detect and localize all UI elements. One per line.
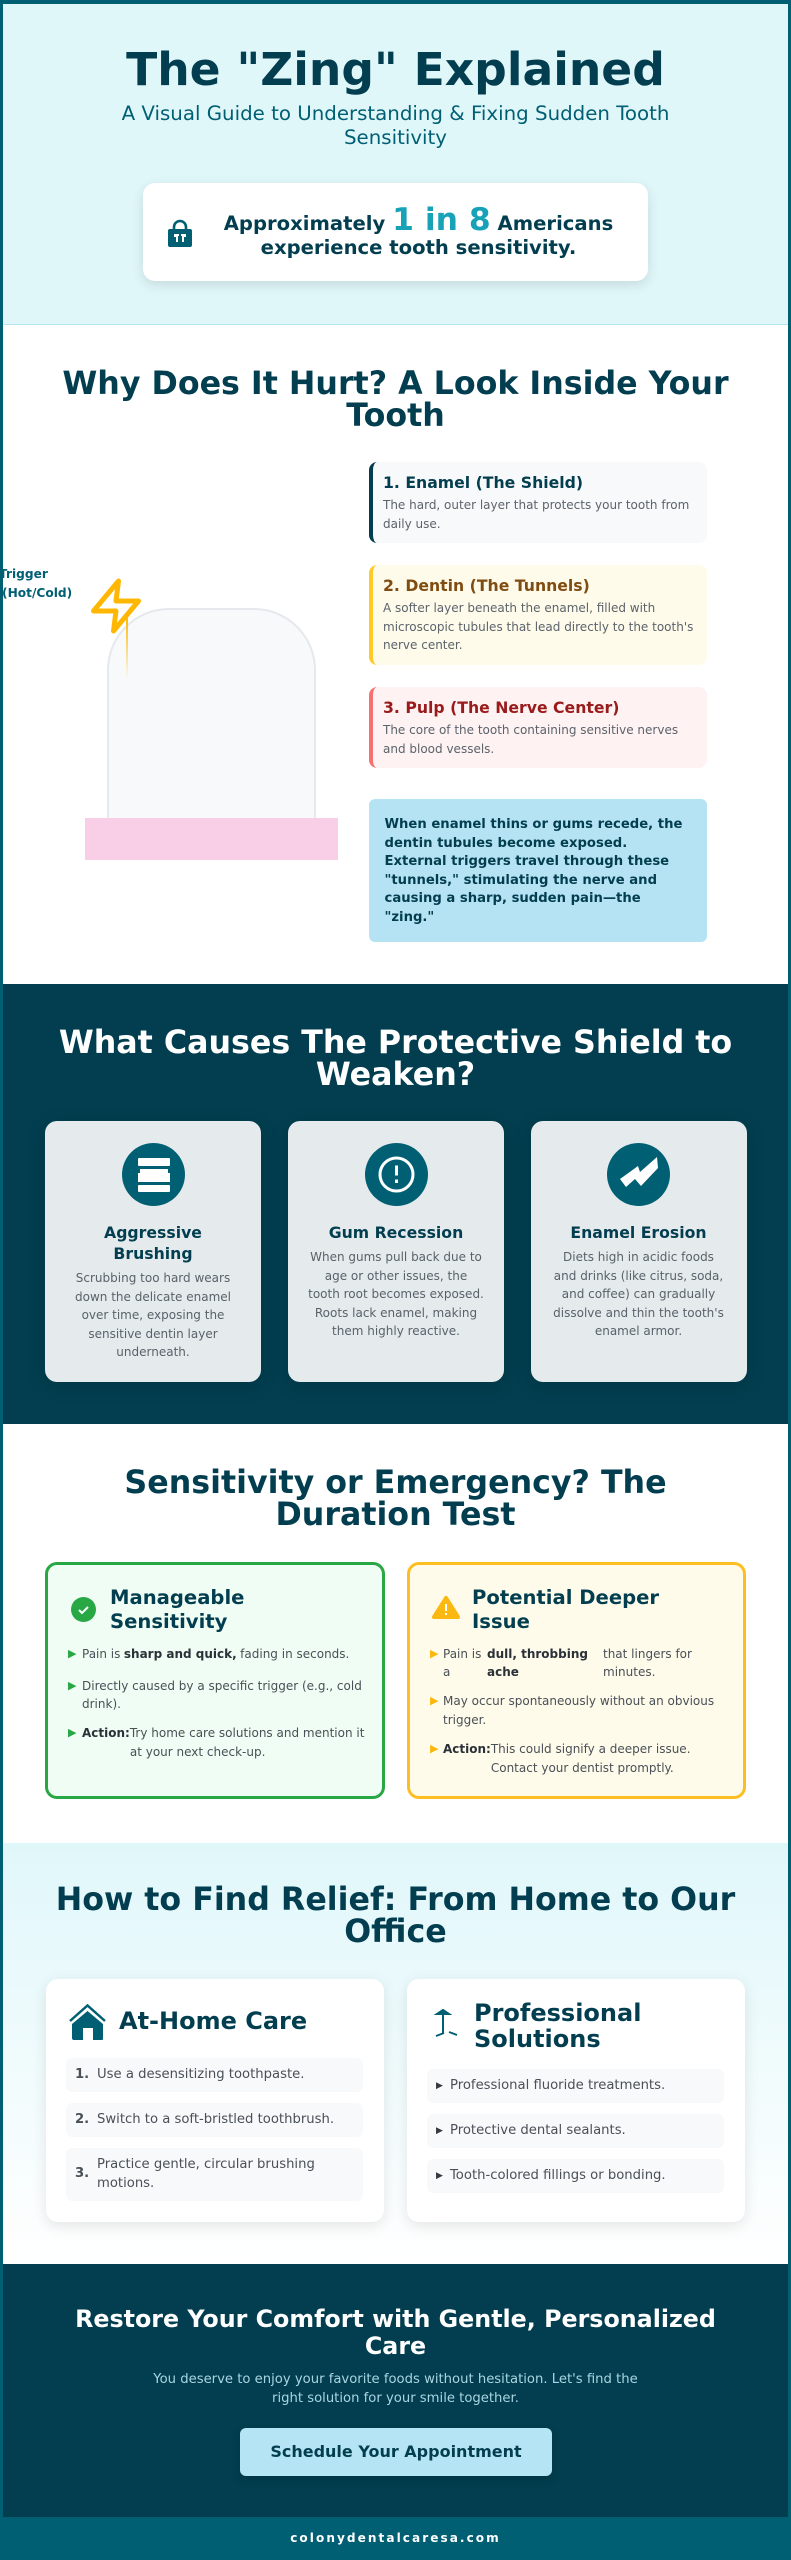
gum band <box>84 818 338 860</box>
item 2 <box>66 2103 363 2137</box>
panel: duration test <box>0 1424 791 1843</box>
bullet points: Contact your dentist promptly. <box>491 1760 674 1774</box>
callout text: When enamel thins or gums recede, the <box>384 817 682 832</box>
title <box>472 1586 659 1633</box>
card: professional solutions <box>407 1979 745 2222</box>
item 2 <box>427 2114 724 2148</box>
bullet points: at your next check-up. <box>130 1744 265 1758</box>
bullet points: dull, throbbing <box>487 1646 588 1660</box>
item 2: Protective dental sealants. <box>450 2123 626 2138</box>
stat text: experience tooth sensitivity. <box>261 236 576 259</box>
item 1: Professional fluoride treatments. <box>450 2078 665 2093</box>
heading <box>75 2305 716 2360</box>
subtitle <box>122 102 669 149</box>
heading <box>59 1025 732 1093</box>
description: dissolve and thin the tooth's <box>553 1306 724 1320</box>
description: The core of the tooth containing sensitive nerves <box>383 723 678 737</box>
bullet points: drink). <box>82 1697 121 1711</box>
callout text: dentin tubules become exposed. <box>384 836 627 850</box>
heading <box>56 1882 736 1950</box>
title: Sensitivity <box>110 1610 227 1633</box>
description <box>382 723 678 756</box>
item 3 <box>66 2148 363 2201</box>
bullet points: ▶ <box>68 1679 76 1692</box>
subtitle: A Visual Guide to Understanding & Fixing Sudden Tooth <box>122 102 669 125</box>
item 2: Switch to a soft-bristled toothbrush. <box>97 2112 334 2127</box>
title: Brushing <box>113 1244 193 1263</box>
description: Roots lack enamel, making <box>315 1306 477 1320</box>
card: gum recession <box>288 1121 504 1382</box>
bullet points: ▶ <box>68 1647 76 1660</box>
title <box>110 1586 244 1633</box>
description <box>308 1250 484 1338</box>
bullet points: ▶ <box>430 1694 438 1707</box>
icon: brushing <box>122 1143 185 1206</box>
footer: colonydentalcaresa.com <box>290 2531 501 2545</box>
bullet points: May occur spontaneously without an obvious <box>443 1694 714 1708</box>
callout <box>369 799 707 942</box>
description: nerve center. <box>383 638 463 652</box>
title: 1. Enamel (The Shield) <box>383 473 583 492</box>
footer <box>0 2517 791 2560</box>
item 2: 2. <box>75 2112 89 2127</box>
icon: lightning bolt <box>91 578 141 634</box>
item 1: ▶ <box>436 2081 443 2091</box>
bullet points: ▶ <box>430 1647 438 1660</box>
callout text: "zing." <box>384 910 434 924</box>
bullet points: ache <box>487 1665 519 1679</box>
title: Aggressive <box>104 1223 202 1242</box>
card: at-home care <box>46 1979 384 2222</box>
item 3: Tooth-colored fillings or bonding. <box>450 2168 666 2183</box>
heading: Restore Your Comfort with Gentle, Personalized <box>75 2305 716 2333</box>
heading: Weaken? <box>316 1057 475 1093</box>
bullet points: Pain is sharp and quick, fading in seconds. <box>82 1646 349 1660</box>
description: tooth root becomes exposed. <box>308 1287 484 1301</box>
icon: warning <box>432 1596 460 1619</box>
heading: Duration Test <box>275 1497 516 1533</box>
bullet points: that lingers for <box>603 1646 692 1660</box>
title: Potential Deeper <box>472 1586 659 1609</box>
title: Solutions <box>474 2025 601 2053</box>
paragraph: You deserve to enjoy your favorite foods without hesitation. Let's find the <box>153 2372 638 2387</box>
bullet points: a <box>443 1665 450 1679</box>
stat text <box>224 202 613 259</box>
layer: pulp <box>369 687 707 768</box>
layer: dentin <box>369 565 707 665</box>
title <box>104 1223 202 1263</box>
card: deeper issue <box>407 1562 746 1799</box>
title: Professional <box>474 1999 641 2027</box>
title: Enamel Erosion <box>570 1223 707 1242</box>
description: The hard, outer layer that protects your tooth from <box>383 498 689 512</box>
bullet points: ▶ <box>430 1742 438 1755</box>
item 3: motions. <box>97 2176 154 2190</box>
paragraph: right solution for your smile together. <box>272 2390 519 2406</box>
icon: check <box>71 1597 96 1622</box>
item 2: ▶ <box>436 2126 443 2136</box>
bullet points: minutes. <box>603 1665 655 1679</box>
layer: enamel <box>369 462 707 543</box>
description: them highly reactive. <box>332 1324 460 1338</box>
description: A softer layer beneath the enamel, filled with <box>383 601 655 615</box>
description: daily use. <box>383 516 441 530</box>
heading: Office <box>344 1914 447 1950</box>
item 1: Use a desensitizing toothpaste. <box>97 2067 304 2082</box>
panel: causes <box>0 984 791 1424</box>
bullet points: Action: <box>82 1726 130 1740</box>
icon: lock <box>168 220 192 247</box>
title: The "Zing" Explained <box>126 43 665 96</box>
description: sensitive dentin layer <box>88 1326 218 1340</box>
title: Gum Recession <box>329 1223 463 1242</box>
heading: What Causes The Protective Shield to <box>59 1025 732 1061</box>
stat text: Approximately 1 in 8 Americans <box>224 202 613 238</box>
bullet points: This could signify a deeper issue. <box>491 1742 691 1756</box>
bullet points: Directly caused by a specific trigger (e.g., cold <box>82 1678 362 1692</box>
heading: Care <box>365 2332 426 2360</box>
item 3: 3. <box>75 2166 89 2181</box>
description <box>75 1271 231 1359</box>
tooth diagram <box>0 567 338 860</box>
bullet points: Pain is <box>443 1646 481 1660</box>
callout text <box>384 817 682 924</box>
callout text: "tunnels," stimulating the nerve and <box>384 872 657 888</box>
description: enamel armor. <box>595 1324 682 1338</box>
item 1 <box>66 2058 363 2092</box>
bullet points: trigger. <box>443 1712 486 1726</box>
heading <box>62 366 729 434</box>
icon: dental tool <box>434 2008 458 2037</box>
trigger label: (Hot/Cold) <box>2 586 72 600</box>
title: Manageable <box>110 1586 244 1609</box>
description: over time, exposing the <box>82 1308 224 1322</box>
description: When gums pull back due to <box>310 1250 482 1264</box>
subtitle: Sensitivity <box>344 126 447 149</box>
bullet points <box>430 1646 714 1774</box>
heading: Tooth <box>346 398 445 434</box>
item 3: ▶ <box>436 2171 443 2181</box>
description: Diets high in acidic foods <box>563 1250 714 1264</box>
trigger line <box>126 616 128 679</box>
paragraph <box>153 2372 638 2406</box>
item 3 <box>427 2159 724 2193</box>
card: aggressive brushing <box>45 1121 261 1382</box>
bullet points: Try home care solutions and mention it <box>130 1726 364 1740</box>
heading: Sensitivity or Emergency? The <box>124 1465 667 1501</box>
description: microscopic tubules that lead directly to the tooth's <box>383 620 693 634</box>
heading: Why Does It Hurt? A Look Inside Your <box>62 366 729 402</box>
callout text: causing a sharp, sudden pain—the <box>384 891 641 906</box>
icon: erosion <box>607 1143 670 1206</box>
title <box>474 1999 641 2053</box>
panel: relief <box>0 1843 791 2264</box>
title: 2. Dentin (The Tunnels) <box>383 576 590 595</box>
button <box>240 2428 552 2476</box>
callout text: External triggers travel through these <box>384 854 669 869</box>
button: Schedule Your Appointment <box>270 2442 522 2461</box>
stat card <box>143 183 648 281</box>
item 3: Practice gentle, circular brushing <box>97 2157 315 2172</box>
panel: call to action <box>0 2264 791 2517</box>
card: manageable <box>45 1562 385 1799</box>
trigger label <box>0 567 72 600</box>
icon: house <box>69 2004 106 2040</box>
description <box>383 601 693 652</box>
description: down the delicate enamel <box>75 1290 231 1304</box>
description <box>553 1250 724 1338</box>
card: enamel erosion <box>530 1121 746 1382</box>
description: and coffee) can gradually <box>562 1287 715 1301</box>
trigger label: Trigger <box>0 567 48 581</box>
heading <box>124 1465 667 1533</box>
title: At-Home Care <box>119 2007 307 2035</box>
description: Scrubbing too hard wears <box>76 1271 230 1285</box>
bullet points: ▶ <box>68 1726 76 1739</box>
description: age or other issues, the <box>325 1268 467 1282</box>
heading: How to Find Relief: From Home to Our <box>56 1882 735 1918</box>
item 1 <box>427 2069 724 2103</box>
title: Issue <box>472 1610 530 1633</box>
description: underneath. <box>116 1345 190 1359</box>
panel: why does it hurt <box>0 325 791 984</box>
tooth body <box>107 608 316 823</box>
description: and drinks (like citrus, soda, <box>554 1268 723 1282</box>
description <box>382 498 689 530</box>
title: 3. Pulp (The Nerve Center) <box>383 698 619 717</box>
description: and blood vessels. <box>383 742 494 756</box>
bullet points: Action: <box>443 1742 491 1756</box>
header panel <box>0 0 791 325</box>
icon: alert circle <box>365 1143 428 1206</box>
bullet points <box>68 1646 364 1758</box>
item 1: 1. <box>75 2067 89 2082</box>
